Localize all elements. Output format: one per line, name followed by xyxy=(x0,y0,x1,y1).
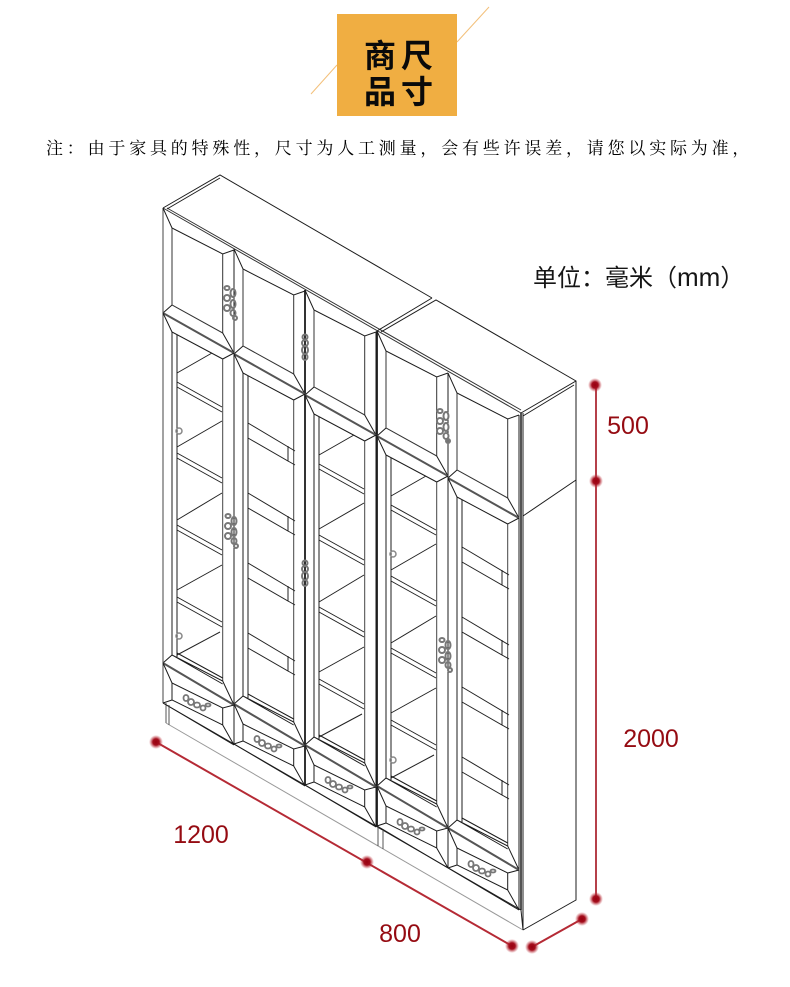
width dimension line xyxy=(149,735,519,953)
door column 2 xyxy=(234,249,305,786)
cabinet carcass xyxy=(163,175,576,930)
unit label: 单位：毫米（mm） xyxy=(533,262,744,292)
depth dimension line xyxy=(525,912,589,954)
title badge: 品 xyxy=(364,74,396,110)
door column 1 xyxy=(163,208,234,745)
title badge: 尺 xyxy=(401,38,433,74)
note text: 注：由于家具的特殊性，尺寸为人工测量，会有些许误差，请您以实际为准， xyxy=(46,139,753,158)
height dimension line xyxy=(588,378,603,906)
title badge: 寸 xyxy=(401,74,433,110)
door handles xyxy=(176,286,496,876)
dimension: 800: 800 xyxy=(379,920,421,948)
door column 5 xyxy=(448,373,519,910)
dimension: 500: 500 xyxy=(607,412,649,440)
dimension: 1200: 1200 xyxy=(173,821,229,849)
dimension: 2000: 2000 xyxy=(623,725,679,753)
bookcase drawing xyxy=(163,175,576,930)
door column 4 xyxy=(377,331,448,868)
title badge xyxy=(337,14,457,116)
door column 3 xyxy=(305,290,376,827)
header accent lines xyxy=(311,7,489,94)
title badge: 商 xyxy=(364,38,396,74)
